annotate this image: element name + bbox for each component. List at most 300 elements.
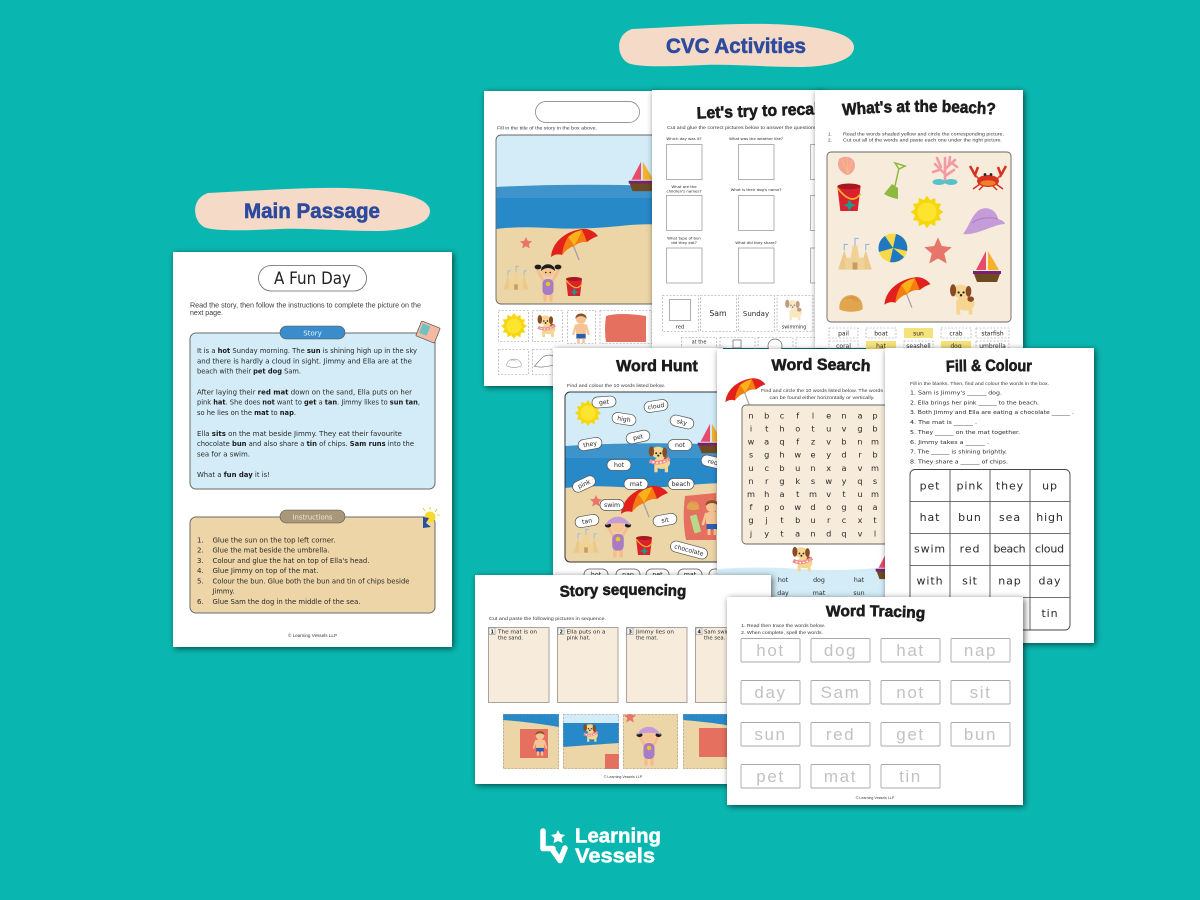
letter grid [742,405,892,544]
word table: pink [957,480,983,492]
story box: Story [303,330,322,338]
title: Fill & Colour [946,358,1032,372]
letter grid: n [748,410,754,420]
word labels: beach [672,481,690,488]
word labels: they [583,440,598,449]
icon: seashell [838,157,855,175]
story box: pink hat. She does not want to get a tan. Jimmy likes to sun tan, [197,398,420,407]
footer credit: © Learning Vessels LLP [288,632,337,638]
letter grid: e [810,450,816,460]
word list pills: pet [652,572,663,578]
heading: Main Passage: Main Passage [244,200,380,223]
sequence box 2: Ella puts on a [566,630,606,636]
beach scene [565,392,735,562]
letter grid: t [780,515,784,525]
instructions: Read the words shaded yellow and circle the corresponding picture. [843,132,1004,136]
letter grid: n [810,528,816,538]
letter grid: t [842,489,846,499]
story box [190,326,435,489]
letter grid: n [857,436,863,446]
word table: red [960,542,980,556]
letter grid: j [765,515,768,525]
letter grid: m [809,489,817,499]
letter grid: w [794,450,801,460]
instructions box: Jimmy. [212,588,234,596]
letter grid: b [764,410,769,420]
instructions box: 4. [197,567,204,575]
word list pills: nap [622,572,634,578]
tracing boxes: pet [756,767,785,786]
letter grid: a [857,410,863,420]
letter grid: d [841,450,847,460]
panel: What's at the beach worksheet [812,87,1029,350]
letter grid: y [842,476,847,486]
tracing boxes: hot [756,641,785,660]
picture tile: dog in sea [563,714,619,769]
tracing boxes: Sam [821,683,860,702]
word labels: sit [661,517,670,525]
letter grid: v [858,463,863,473]
title: Word Hunt [616,359,698,372]
question boxes: did they eat? [671,240,697,245]
word chips: pail [838,330,849,338]
letter grid: w [794,502,801,512]
heading: CVC Activities [619,24,854,67]
letter grid: u [826,424,831,434]
water strip with word list: dog [813,577,825,584]
water strip with word list: day [777,590,789,597]
word table [910,470,1070,630]
instructions: 1. [828,132,832,136]
icon: book [416,321,440,343]
sequence box 2: 2 [560,630,564,636]
letter grid: p [872,410,878,420]
sequence box 1: The mat is on [497,630,537,636]
logo: Learning Vessels [543,826,661,868]
word chips: umbrella [979,343,1006,350]
sequence box 3: Jimmy lies on [635,630,674,636]
fill-in sentences: 5. They ______ on the mat together. [910,430,1020,436]
tracing boxes: bun [964,725,997,744]
instructions: Find and circle the 10 words listed below. The words [761,388,884,394]
letter grid: b [779,463,785,473]
tracing boxes: nap [964,641,997,660]
instructions box: Glue Jimmy on top of the mat. [212,567,318,575]
instructions box: Colour the bun. Glue both the bun and tin of chips beside [212,578,410,586]
question boxes [666,136,846,283]
letter grid: w [748,436,755,446]
tracing boxes: not [896,683,925,702]
footer credit: © Learning Vessels LLP [856,796,895,800]
tracing boxes: hat [896,641,925,660]
word labels: red [707,458,719,467]
letter grid: r [858,450,862,460]
story box: Ella sits on the mat beside Jimmy. They eat their favourite [197,429,403,438]
sequence box 1 [488,628,549,702]
sequence box 1: the sand. [498,636,523,642]
icon: umbrella [884,277,931,308]
letter grid: q [779,436,785,446]
picture box [827,152,1011,322]
heading: Main Passage [195,188,430,231]
instruction: Fill in the blanks. Then, find and colour the words in the box. [910,381,1049,387]
word table: pet [920,480,940,492]
sequence box 4: 4 [698,630,702,636]
letter grid: h [764,489,769,499]
letter grid: l [812,410,814,420]
instructions box: Glue the sun on the top left corner. [212,536,336,544]
story box: so he lies on the mat to nap. [197,408,296,417]
story box: beach with their pet dog Sam. [197,367,301,376]
word table: swim [914,542,946,556]
water strip with word list: hot [778,577,789,584]
icon: bun [839,295,863,312]
letter grid: b [872,424,878,434]
title: Word Tracing [826,604,925,622]
story box: It is a hot Sunday morning. The sun is shining high up in the sky [197,346,418,355]
water strip with word list: sun [853,590,865,597]
word labels: tan [582,517,593,526]
word chips: starfish [981,330,1004,338]
answer cut-outs: at the [692,340,706,346]
tracing boxes: day [754,683,787,702]
heading: CVC Activities: CVC Activities [666,35,806,58]
instructions box: 1. [197,536,204,544]
letter grid: g [779,476,785,486]
word labels: pink [577,479,592,491]
intro text: Read the story, then follow the instructions to complete the picture on the [190,300,421,310]
icon: umbrella [725,378,765,405]
fill-in sentences: 3. Both Jimmy and Ella are eating a chocolate ______ . [910,410,1074,416]
instructions box: 5. [197,578,204,586]
icon: sun [911,196,943,228]
word table: they [996,480,1024,492]
letter grid: o [826,502,831,512]
word labels: cloud [647,402,665,411]
icon: boat [973,251,1001,282]
answer cut-outs: Sunday [743,310,769,318]
word labels: high [617,415,631,424]
instructions box: Instructions [293,514,333,522]
letter grid: l [874,528,876,538]
letter grid: f [750,502,754,512]
letter grid: v [826,436,831,446]
letter grid: q [857,476,863,486]
fill-in sentences: 6. Jimmy takes a ______ . [910,440,989,446]
letter grid: v [842,424,847,434]
logo wordmark: Learning [575,826,661,848]
story box: What a fun day it is! [197,470,270,479]
instructions: Cut out all of the words and paste each one under the right picture. [843,138,1002,142]
word labels: sky [676,418,688,427]
answer cut-outs: Sam [709,309,727,318]
story box: After laying their red mat down on the sand, Ella puts on her [197,388,412,396]
word table: sit [962,574,978,588]
letter grid: n [748,476,754,486]
question boxes: children's names? [666,188,702,194]
letter grid: s [873,476,877,486]
word list pills: hot [591,572,602,578]
letter grid: y [826,450,831,460]
letter grid: d [826,528,831,538]
instruction: Cut and paste the following pictures in sequence. [489,616,606,622]
panel: Word Tracing worksheet [724,594,1030,811]
icon: coral [932,157,958,185]
letter grid: t [765,424,769,434]
word table: nap [998,574,1022,588]
logo wordmark: Vessels [575,846,655,868]
instructions [761,388,884,401]
word table: sea [999,511,1021,524]
question boxes: What did they share? [735,240,777,245]
sequence box 1: 1 [490,630,494,636]
instruction: Find and colour the 10 words listed below. [567,383,665,389]
word list pills: mat [684,572,697,578]
instructions box: 6. [197,598,204,606]
answer cut-outs [662,296,816,358]
letter grid: o [779,502,785,512]
picture tile: boy on mat [503,714,559,769]
letter grid: r [765,476,769,486]
letter grid: b [872,450,878,460]
letter grid: d [810,502,816,512]
tracing boxes: sit [970,683,991,702]
letter grid: u [857,489,863,499]
tracing boxes: sun [754,725,787,744]
letter grid: s [749,450,753,460]
instructions [741,623,825,636]
blank title pill [536,102,640,122]
panel: Word Hunt worksheet [550,344,727,578]
water strip with word list: hat [854,577,865,584]
letter grid: o [795,424,800,434]
letter grid: p [764,502,769,512]
tracing boxes: mat [824,767,857,786]
tracing boxes: red [826,725,855,744]
word chips: seashell [906,343,931,350]
panel: Let's try to recall worksheet [648,87,826,349]
sequence box 4: Sam swims in [704,630,740,636]
letter grid: c [780,410,784,420]
instructions box: Glue Sam the dog in the middle of the sea. [212,598,360,606]
word chips: sun [913,330,924,338]
instruction: Cut and glue the correct pictures below to answer the questions. [667,125,818,131]
title: Word Search [771,358,870,372]
letter grid: t [780,528,784,538]
word table: up [1042,480,1058,492]
word table: hat [920,511,940,524]
word table: high [1036,511,1064,524]
question boxes: Which day was it? [666,136,702,141]
letter grid: h [779,424,785,434]
word labels [571,396,726,560]
letter grid: f [796,410,800,420]
letter grid: a [841,463,847,473]
letter grid: v [858,528,863,538]
letter grid: k [795,476,800,486]
word chips: hat [876,343,887,350]
answer cut-outs: swimming [782,324,806,330]
story box: and there is hardly a cloud in sight. Jimmy and Ella are at the [197,356,413,366]
icon: crab [970,166,1006,190]
letter grid: w [825,476,832,486]
letter grid: x [826,463,831,473]
letter grid: t [873,515,877,525]
letter grid: e [826,410,831,420]
letter grid: a [795,528,800,538]
title: Story sequencing [560,584,686,600]
footer credit: © Learning Vessels LLP [604,775,643,779]
word table: with [917,574,943,588]
beach scene [496,135,666,304]
letter grid: f [796,436,800,446]
panel: Fill & Colour worksheet [882,344,1100,649]
panel: main passage worksheet [173,252,452,647]
letter grid: g [857,424,863,434]
letter grid: x [858,515,863,525]
letter grid: n [841,410,847,420]
letter grid: j [749,528,752,538]
instructions [828,132,1004,142]
word labels: pet [632,433,644,442]
instructions box: 2. [197,546,204,554]
icon: ball [878,234,908,262]
instructions: can be found either horizontally or vertically. [770,395,874,401]
instructions: 1. Read then trace the words below. [741,623,825,629]
word labels: get [599,399,610,407]
word labels: not [675,442,686,449]
word chips: boat [874,330,888,338]
letter grid: a [872,502,878,512]
title pill: A Fun Day: A Fun Day [274,269,351,288]
word chips: crab [949,330,963,338]
panel: beach picture worksheet [484,91,666,386]
fill-in sentences: 2. Ella brings her pink ______ to the beach. [910,400,1039,406]
letter grid: a [764,436,769,446]
letter grid: u [748,463,754,473]
letter grid: g [764,450,769,460]
letter grid: a [779,489,785,499]
word table: bun [958,511,982,524]
title: Let's try to recall [697,102,815,120]
letter grid: m [747,489,755,499]
instructions box: Colour and glue the hat on top of Ella's head. [212,557,370,565]
word list pills [584,569,733,580]
letter grid: y [764,528,769,538]
letter grid: q [857,502,863,512]
letter grid: u [795,463,800,473]
letter grid: i [750,424,752,434]
intro text [190,300,421,317]
word chips: dog [950,343,962,350]
word table: tin [1041,607,1059,620]
letter grid: c [842,515,846,525]
sequence box 4 [696,628,756,702]
fill-in sentences: 1. Sam is Jimmy's ______ dog. [910,391,1002,397]
icon: bucket [837,184,861,211]
instructions box: 3. [197,557,204,565]
story box: sea for a swim. [197,449,250,458]
icon: light bulb [423,507,440,528]
letter grid: b [795,515,800,525]
fill-in sentences: 7. The ______ is shining brightly. [910,449,1007,455]
letter grid: u [810,515,816,525]
instructions: 2. When complete, spell the words. [741,630,823,636]
logo wordmark [575,826,661,868]
sequence box 3 [626,628,687,702]
water strip with word list: mat [813,590,826,597]
question boxes: What type of bun [667,236,701,240]
letter grid: n [810,463,816,473]
sequence box 3: the mat. [636,636,658,642]
letter grid: s [811,476,815,486]
word chips [829,328,1009,351]
instructions: 2. [828,138,832,142]
picture tile: girl with hat [623,711,678,769]
tracing boxes: dog [824,641,857,660]
sequence box 3: 3 [628,630,632,636]
answer cut-outs: red [676,324,684,330]
letter grid: g [841,502,847,512]
instructions box: Glue the mat beside the umbrella. [212,546,330,554]
icon: starfish [924,237,952,264]
letter grid: h [779,450,785,460]
fill-in sentences: 4. The mat is ______ . [910,420,977,426]
letter grid: z [811,436,815,446]
icon: shovel [884,163,905,199]
sequence box 4: the sea. [704,636,726,642]
letter grid: m [871,436,879,446]
tracing boxes [741,638,1010,788]
panel: Story sequencing worksheet [472,572,778,790]
story box: chocolate bun and also share a tin of chips. Sam runs into the [197,439,415,448]
letter grid: t [796,489,800,499]
intro text: next page. [190,308,223,317]
word table: day [1039,574,1061,588]
word chips: coral [836,343,851,350]
title: What's at the beach? [842,100,996,116]
title pill: A Fun Day [258,266,366,291]
fill-in sentences: 8. They share a ______ of chips. [910,459,1008,465]
letter grid: m [871,463,879,473]
water strip with word list [717,547,902,597]
tracing boxes: get [896,725,925,744]
letter grid: g [748,515,754,525]
letter grid: q [841,528,847,538]
instruction: Fill in the title of the story in the box above. [497,126,597,132]
fill-in sentences [910,391,1074,465]
word labels: swim [604,502,620,509]
word labels: mat [630,481,643,488]
picture tile: empty mat [683,714,727,769]
word labels: hot [614,462,625,469]
letter grid: c [764,463,769,473]
instructions box [190,510,435,613]
question boxes: What was the weather like? [729,136,783,141]
letter grid: r [827,515,831,525]
letter grid: b [841,436,847,446]
tracing boxes: tin [899,767,922,786]
sequence box 2: pink hat. [566,636,591,642]
word table: cloud [1035,542,1065,556]
cut-outs row [498,310,652,374]
icon: hat [963,208,1005,234]
letter grid: t [811,424,815,434]
word labels: chocolate [673,543,704,558]
letter grid: v [826,489,831,499]
question boxes: What are the [671,184,697,189]
letter grid: m [871,489,879,499]
